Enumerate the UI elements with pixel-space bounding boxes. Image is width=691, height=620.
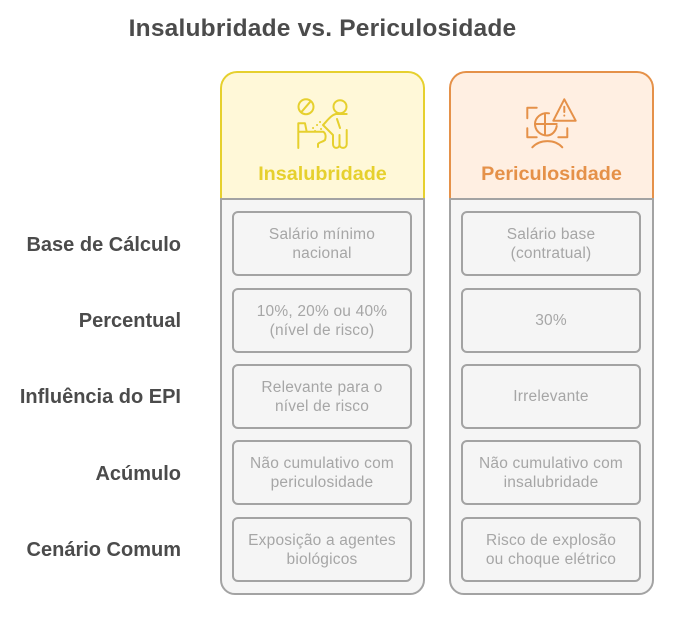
cell: cenário comum: ou choque elétrico (486, 551, 616, 568)
cell: salário base: Salário base (507, 226, 595, 243)
cell: acúmulo: Não cumulativo com (250, 455, 394, 472)
cell: cenário comum: Risco de explosão (486, 532, 616, 549)
icon: target with warning triangle (526, 98, 577, 148)
cell: salário base (461, 211, 641, 276)
column name: Insalubridade (258, 163, 387, 185)
cell: percentual: 30% (535, 312, 567, 329)
panel: Periculosidade column (449, 71, 654, 595)
cell: percentual: (nível de risco) (270, 322, 374, 339)
header divider (220, 198, 425, 200)
cell: percentual (232, 288, 412, 353)
cell: salário mínimo: Salário mínimo (269, 226, 375, 243)
row label: Influência do EPI: Influência do EPI (20, 386, 181, 408)
cell: acúmulo: Não cumulativo com (479, 455, 623, 472)
cell: influência do EPI: Irrelevante (513, 388, 589, 405)
cell: salário mínimo: nacional (292, 245, 352, 262)
row label: Cenário Comum: Cenário Comum (27, 539, 181, 561)
icon: worker and prohibited sign (297, 98, 348, 149)
cell: salário base: (contratual) (511, 245, 591, 262)
row label: Base de Cálculo: Base de Cálculo (26, 234, 181, 256)
row label: Acúmulo: Acúmulo (95, 463, 181, 485)
cell: salário mínimo (232, 211, 412, 276)
column body (220, 198, 425, 595)
cell: cenário comum: Exposição a agentes (248, 532, 396, 549)
cell: influência do EPI (232, 364, 412, 429)
cell: acúmulo: periculosidade (271, 474, 373, 491)
cell: acúmulo (232, 440, 412, 505)
cell: influência do EPI: nível de risco (275, 398, 369, 415)
column name: Periculosidade (481, 163, 622, 185)
cell: acúmulo (461, 440, 641, 505)
cell: percentual (461, 288, 641, 353)
cell: acúmulo: insalubridade (504, 474, 598, 491)
cell: cenário comum: biológicos (287, 551, 357, 568)
column body (449, 198, 654, 595)
title: Insalubridade vs. Periculosidade (129, 15, 516, 42)
cell: cenário comum (461, 517, 641, 582)
panel: Insalubridade column (220, 71, 425, 595)
header divider (449, 198, 654, 200)
cell: influência do EPI (461, 364, 641, 429)
row label: Percentual: Percentual (79, 310, 181, 332)
cell: percentual: 10%, 20% ou 40% (257, 303, 387, 320)
column header (449, 71, 654, 200)
cell: cenário comum (232, 517, 412, 582)
cell: influência do EPI: Relevante para o (261, 379, 383, 396)
column header (220, 71, 425, 200)
